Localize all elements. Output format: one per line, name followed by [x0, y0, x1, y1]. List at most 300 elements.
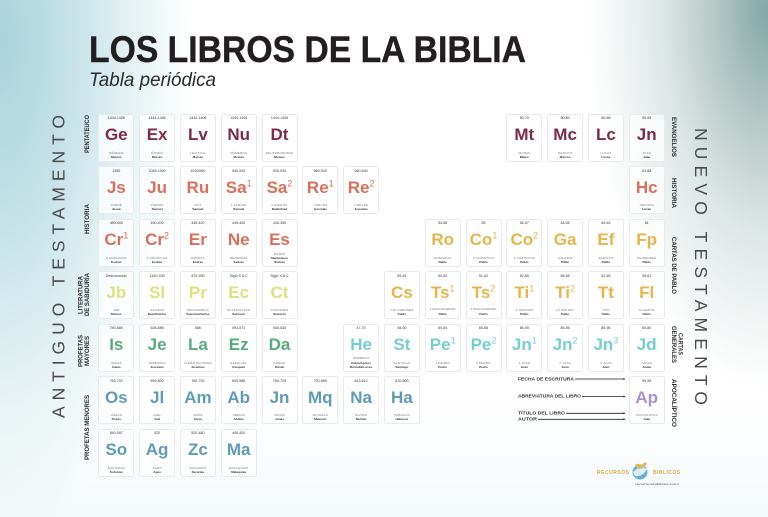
card: Sofonías: 640-597 [110, 431, 123, 435]
card: Oseas: OSEAS [111, 413, 122, 417]
card: Juan [629, 114, 665, 162]
card: Levítico: Moisés [193, 155, 203, 159]
card: Gálatas [547, 219, 583, 267]
card: 2 Timoteo: Pablo [561, 312, 569, 316]
card: Sofonías: So [105, 440, 127, 459]
card: 1 Samuel: Samuel [233, 207, 244, 211]
logo: Recursos Bíblicos: BIBLICOS [653, 470, 681, 476]
card: 2 Tesalonicenses: 51-52 [479, 274, 488, 278]
card: 3 Juan: 85-95 [601, 326, 610, 330]
card: Mateo: 50-70 [520, 116, 529, 120]
card: Abdías: 605-586 [232, 379, 245, 383]
card: Judas: 65-80 [642, 326, 651, 330]
card: Juan: JUAN [642, 151, 651, 155]
card: Hechos: Hc [636, 178, 658, 197]
card: Deuteronomio: DEUTERONOMIO [266, 151, 293, 155]
card: 1 Corintios: 1 CORINTIOS [473, 256, 494, 260]
card: Ezequiel: EZEQUIEL [230, 361, 247, 365]
card: Proverbios: 970-930 [191, 274, 204, 278]
card: Esdras: Esdras [193, 260, 203, 264]
card: 3 Juan: 3 JUAN [600, 361, 612, 365]
card: 2 Tesalonicenses: Pablo [479, 312, 488, 316]
card: Joel: JOEL [153, 413, 161, 417]
card: Amós: Am [184, 388, 212, 407]
card: Abdías: Abdías [234, 417, 244, 421]
card: 1 Corintios: 55 [482, 221, 486, 225]
card: 1 Pedro: 1 PEDRO [435, 361, 450, 365]
card: 1 Tesalonicenses: 1 TESALONICENSES [430, 308, 456, 311]
card: Amós: Amós [194, 417, 202, 421]
card: 1 Crónicas [98, 219, 134, 267]
card: Gálatas: Ga [554, 230, 576, 249]
card: Nahúm [343, 376, 379, 424]
card: 1 Juan [506, 324, 542, 372]
card: 1 Pedro: 60-64 [438, 326, 447, 330]
card: Josué: Josué [112, 207, 121, 211]
card: Habacuc: 610-600 [395, 379, 408, 383]
card: Jonás [262, 376, 298, 424]
card: Isaías: Is [109, 335, 123, 354]
card: Apocalipsis: APOCALIPSIS [636, 413, 658, 417]
card: Job: Moisés [111, 312, 122, 316]
card: Deuteronomio: Moisés [274, 155, 285, 159]
card: Efesios: 60-63 [601, 221, 610, 225]
card: Zacarías: Zacarías [192, 470, 204, 474]
card: 2 Corintios: 55-57 [520, 221, 529, 225]
card: Filipenses: FILIPENSES [637, 256, 656, 260]
card: Deuteronomio [262, 114, 298, 162]
card: Eclesiastés: Siglo X A.C [230, 274, 248, 278]
card: Miqueas: 700-680 [314, 379, 327, 383]
card: Daniel: Daniel [275, 365, 284, 369]
card: 2 Samuel: 2 SAMUEL [271, 203, 288, 207]
card: Rut: RUT [194, 203, 201, 207]
card: 2 Reyes [343, 166, 379, 214]
card: Rut: 1010/960 [190, 169, 205, 173]
card: Génesis: GÉNESIS [109, 151, 124, 155]
card: Salmos: SALMOS [150, 308, 164, 312]
card: 2 Timoteo: Ti2 [555, 283, 575, 302]
card: Lucas: LUCAS [600, 151, 611, 155]
card: Colosenses: Cs [391, 283, 413, 302]
card: 2 Juan [547, 324, 583, 372]
card: 1 Tesalonicenses [425, 271, 461, 319]
card: Joel: Jl [150, 388, 164, 407]
card: Habacuc: Ha [391, 388, 413, 407]
card: Mateo: Mt [514, 125, 534, 144]
card: Eclesiastés: ECLESIASTÉS [227, 308, 250, 312]
card: Romanos: Pablo [438, 260, 447, 264]
card: Jonás: 760-725 [273, 379, 286, 383]
card: Nahúm: Na [350, 388, 372, 407]
card: Amós: AMÓS [193, 413, 203, 417]
card: Amós [180, 376, 216, 424]
card: Éxodo [139, 114, 175, 162]
card: Colosenses: 59-61 [397, 274, 406, 278]
card: Lamentaciones [180, 324, 216, 372]
logo: Recursos Bíblicos: RECURSOS [597, 470, 630, 476]
card: Nehemías [221, 219, 257, 267]
card: 2 Tesalonicenses [466, 271, 502, 319]
card: Isaías: 740-680 [110, 326, 123, 330]
card: Habacuc: HABACUC [394, 413, 410, 417]
card: Nahúm: 613-612 [354, 379, 368, 383]
card: Ezequiel: 593-571 [232, 326, 245, 330]
card: Santiago: St [393, 335, 410, 354]
card: Colosenses [384, 271, 420, 319]
card: Hebreos: HEBREOS [353, 356, 369, 360]
card: Éxodo: ÉXODO [151, 151, 163, 155]
card: Oseas: Os [105, 388, 128, 407]
card: Deuteronomio: Dt [271, 125, 288, 144]
card: Levítico: LEVÍTICO [190, 151, 206, 155]
card: 2 Juan: Juan [561, 365, 569, 369]
card: Filemón: Pablo [642, 312, 651, 316]
card: 1 Timoteo [506, 271, 542, 319]
legend [518, 376, 626, 422]
card: 2 Samuel: Natán/Gad [272, 207, 287, 211]
card: Ezequiel [221, 324, 257, 372]
card: Miqueas: Mq [308, 388, 333, 407]
icon: globe [632, 462, 648, 480]
card: 1 Pedro [425, 324, 461, 372]
card: Zacarías: ZACARÍAS [190, 466, 206, 470]
card: Números: NÚMEROS [230, 151, 247, 155]
card: Filipenses: Fp [636, 230, 657, 249]
card: 2 Timoteo [547, 271, 583, 319]
card: Malaquías: Ma [227, 440, 250, 459]
card: Juan: Jn [637, 125, 657, 144]
card: 2 Juan: Jn2 [553, 335, 578, 354]
logo: Recursos Bíblicos: recursosbiblicos.com [635, 482, 680, 486]
card: Colosenses: Pablo [398, 312, 406, 316]
category: Literatura de sabiduría [78, 273, 91, 316]
card: Nehemías: Ne [228, 230, 250, 249]
card: Malaquías: 440-400 [232, 431, 245, 435]
card: 3 Juan [588, 324, 624, 372]
card: 3 Juan: Jn3 [593, 335, 618, 354]
card: 1 Crónicas: 1 CRÓNICAS [106, 256, 126, 260]
card: Abdías: ABDÍAS [233, 413, 245, 417]
card: 2 Tesalonicenses: Ts2 [472, 283, 495, 302]
card: Ester: Es [269, 230, 290, 249]
legend: título: TÍTULO DEL LIBRO [518, 411, 566, 416]
card: Proverbios: PROVERBIOS [187, 308, 209, 312]
card: Génesis: Ge [105, 125, 128, 144]
card: Eclesiastés: Salomón [232, 312, 245, 316]
category: Profetas menores: PROFETAS MENORES [84, 395, 91, 460]
card: Romanos: Ro [431, 230, 454, 249]
legend: abreviatura: ABREVIATURA DEL LIBRO [518, 394, 582, 399]
card: Oseas [98, 376, 134, 424]
card: Proverbios: Pr [189, 283, 207, 302]
card: 1 Pedro: Pe1 [430, 335, 456, 354]
card: 2 Crónicas [139, 219, 175, 267]
card: Lamentaciones: Jeremías [191, 365, 205, 369]
card: Nahúm: NAHÚM [355, 413, 367, 417]
card: 1 Reyes [302, 166, 338, 214]
card: 1 Crónicas: Esdras [111, 260, 121, 264]
card: Ageo: Ageo [153, 470, 161, 474]
card: 1 Tesalonicenses: Pablo [438, 312, 447, 316]
category: Cartas generales: CARTAS [676, 333, 684, 355]
card: Tito: 62-65 [601, 274, 610, 278]
card: Mateo: Mateo [520, 155, 529, 159]
card: Amós: 760-750 [191, 379, 204, 383]
card: Lucas [588, 114, 624, 162]
category: Profetas mayores [78, 335, 91, 367]
card: Sofonías [98, 429, 134, 477]
card: Esdras: 445-420 [191, 221, 204, 225]
card: Jonás: Jonás [275, 417, 284, 421]
card: Jueces: Ju [147, 178, 167, 197]
card: 1 Samuel: 940-930 [232, 169, 245, 173]
card: 2 Juan: 2 JUAN [559, 361, 571, 365]
card: 2 Pedro [466, 324, 502, 372]
card: 1 Pedro: Pedro [438, 365, 447, 369]
card: Jueces: JUECES [151, 203, 164, 207]
card: Génesis [98, 114, 134, 162]
card: 2 Samuel: 940-930 [273, 169, 286, 173]
card: Zacarías: 520-480 [191, 431, 204, 435]
card: Tito: TITO [602, 308, 610, 312]
logo: Recursos Bíblicos [597, 462, 681, 486]
side label: Antiguo Testamento: ANTIGUO TESTAMENTO [48, 115, 68, 418]
card: Jeremías: 626-586 [150, 326, 164, 330]
card: Esdras: Er [189, 230, 207, 249]
card: Josué: Js [107, 178, 126, 197]
card: Santiago: SANTIAGO [393, 361, 410, 365]
card: Hebreos: Bernabé/Lucas [350, 365, 372, 369]
card: Levítico [180, 114, 216, 162]
card: Miqueas: Miqueas [314, 417, 326, 421]
card: Miqueas: MIQUEAS [313, 413, 328, 417]
card: Marcos [547, 114, 583, 162]
card: Efesios: Pablo [602, 260, 610, 264]
card: Ester: /Esdras [274, 260, 285, 264]
category: Historia NT: HISTORIA [670, 178, 677, 209]
card: 1 Corintios: Co1 [470, 230, 497, 249]
category: Cartas generales [670, 326, 684, 363]
card: Ezequiel: Ez [229, 335, 249, 354]
card: Tito: Pablo [602, 312, 610, 316]
card: Judas: Jd [637, 335, 657, 354]
card: 2 Juan: 85-95 [560, 326, 570, 330]
card: 1 Tesalonicenses: 50-52 [438, 274, 447, 278]
category: Pentateuco: PENTATEUCO [84, 115, 91, 153]
category: Historia: HISTORIA [84, 203, 91, 234]
card: 2 Pedro: 2 PEDRO [476, 361, 491, 365]
card: Ezequiel: Ezequiel [232, 365, 245, 369]
category labels right [670, 117, 684, 427]
card: Lamentaciones: La [188, 335, 208, 354]
card: Gálatas: 48-55 [560, 221, 570, 225]
card: Oseas: Oseas [112, 417, 121, 421]
card: Apocalipsis: Juan [643, 417, 650, 421]
card: Génesis: 1444-1406 [108, 116, 125, 120]
card: 1 Timoteo: Pablo [520, 312, 529, 316]
card: 1 Reyes: 1 REYES [313, 203, 327, 207]
card: Romanos: 54-58 [438, 221, 447, 225]
card: Santiago: Santiago [395, 365, 408, 369]
card: Filemón [629, 271, 665, 319]
card: Job [98, 271, 134, 319]
category: Literatura de sabiduría: LITERATURA [78, 275, 84, 314]
card: Hechos: 63-68 [642, 169, 651, 173]
card: Daniel: Da [269, 335, 290, 354]
card: Nahúm: Nahúm [356, 417, 366, 421]
card: Hebreos: He [350, 335, 372, 354]
card: 2 Reyes: Re2 [348, 178, 374, 197]
card: 1 Samuel: 1 SAMUEL [230, 203, 247, 207]
card: Joel [139, 376, 175, 424]
card: Tito: Tt [598, 283, 614, 302]
card: Ageo [139, 429, 175, 477]
card: Jeremías: Jeremías [150, 365, 164, 369]
card: Josué: 1390 [112, 169, 120, 173]
card: Apocalipsis: Ap [635, 388, 658, 407]
card: Isaías [98, 324, 134, 372]
card: Salmos: 1440-930 [150, 274, 165, 278]
card: 1 Tesalonicenses: Ts1 [431, 283, 454, 302]
card: 2 Samuel: Sa2 [267, 178, 292, 197]
card: Filipenses: 61 [645, 221, 649, 225]
card: Efesios [588, 219, 624, 267]
card: Lucas: Lucas [601, 155, 610, 159]
card: Filemón: FILEMÓN [639, 308, 654, 312]
card: Filipenses [629, 219, 665, 267]
card: Cantares: Siglo X A.C [270, 274, 289, 278]
card: Deuteronomio: 1444-1406 [271, 116, 288, 120]
card: Tito [588, 271, 624, 319]
card: 2 Pedro: 65-68 [479, 326, 488, 330]
card: 1 Juan: 85-95 [520, 326, 529, 330]
card: Hebreos: 47-70 [356, 326, 366, 330]
card: 3 Juan: Juan [602, 365, 610, 369]
card: Cantares: CANTARES [271, 308, 288, 312]
card: Marcos: MARCOS [558, 151, 572, 155]
legend: autor: AUTOR [518, 417, 538, 422]
card: Job: Desconocido [106, 274, 127, 278]
card: Habacuc: Habacuc [395, 417, 408, 421]
card: Gálatas: Pablo [561, 260, 569, 264]
card: 1 Timoteo: 1 TIMOTEO [515, 308, 533, 312]
card: 2 Timoteo: 66-68 [560, 274, 570, 278]
card: 2 Crónicas: 2 CRÓNICAS [147, 256, 167, 260]
category: Literatura de sabiduría: DE SABIDURÍA [83, 273, 91, 316]
card: Juan: 90-95 [642, 116, 651, 120]
title: LOS LIBROS DE LA BIBLIA [89, 28, 526, 70]
card: Mateo: MATEO [519, 151, 530, 155]
legend: fecha: FECHA DE ESCRITURA [518, 376, 575, 382]
card: Salmos: David/Varios [148, 312, 166, 316]
card: Números: 1444-1406 [230, 116, 247, 120]
card: 1 Timoteo: Ti1 [514, 283, 534, 302]
card: 1 Crónicas: 450-400 [110, 221, 123, 225]
card: Éxodo: Moisés [152, 155, 162, 159]
card: 2 Corintios [506, 219, 542, 267]
card: Apocalipsis: 95-96 [642, 379, 651, 383]
card: Job: JOB [113, 308, 120, 312]
category: Cartas de Pablo: CARTAS DE PABLO [670, 237, 677, 294]
card: Esdras [180, 219, 216, 267]
card: 2 Samuel [262, 166, 298, 214]
card: Apocalipsis [629, 376, 665, 424]
card: Rut: Samuel [192, 207, 203, 211]
card: Lucas: 60-68 [601, 116, 610, 120]
card: 2 Tesalonicenses: 2 TESALONICENSES [471, 308, 496, 311]
card: 2 Corintios: 2 CORINTIOS [514, 256, 535, 260]
card: Hechos: Lucas [642, 207, 651, 211]
card: Ester: 440-350 [273, 221, 286, 225]
card: 1 Samuel: Sa1 [226, 178, 252, 197]
card: 1 Juan: Juan [521, 365, 528, 369]
card: Marcos: Mc [553, 125, 577, 144]
card: Jeremías: JEREMÍAS [149, 361, 165, 365]
card: 2 Reyes: 2 REYES [354, 203, 368, 207]
card: Cantares: Salomón [273, 312, 286, 316]
card: Daniel: DANIEL [273, 361, 286, 365]
category: Cartas generales: GENERALES [670, 326, 677, 363]
card: 1 Crónicas: Cr1 [104, 230, 128, 249]
card: Daniel [262, 324, 298, 372]
card: Ester [262, 219, 298, 267]
card: Números [221, 114, 257, 162]
card: Josué: JOSUÉ [111, 203, 122, 207]
subtitle: Tabla periódica [89, 70, 216, 91]
card: Oseas: 753-701 [110, 379, 123, 383]
card: Lamentaciones: LAMENTACIONES [184, 361, 212, 365]
card: Juan: Juan [643, 155, 650, 159]
card: Eclesiastés [221, 271, 257, 319]
card: Éxodo: Ex [147, 125, 167, 144]
card: Habacuc [384, 376, 420, 424]
card: Ageo: AGEO [152, 466, 162, 470]
card: Josué [98, 166, 134, 214]
card: Zacarías [180, 429, 216, 477]
card: Jonás: Jn [270, 388, 289, 407]
category labels left [78, 115, 91, 460]
card: 1 Juan: Jn1 [512, 335, 537, 354]
card: Filemón: Fl [639, 283, 654, 302]
card: Santiago [384, 324, 420, 372]
card: Sofonías: SOFONÍAS [108, 466, 125, 470]
card: 1 Reyes: 560-540 [314, 169, 327, 173]
category: Apocalíptico: APOCALÍPTICO [670, 379, 678, 427]
card: 2 Crónicas: Cr2 [145, 230, 169, 249]
card: Abdías: Ab [227, 388, 250, 407]
card: Jeremías [139, 324, 175, 372]
card: Proverbios: Salomón/Varios [186, 312, 210, 316]
category: Profetas mayores: PROFETAS [78, 335, 84, 367]
card: Cantares: Ct [271, 283, 288, 302]
card: 1 Corintios: Pablo [479, 260, 488, 264]
card: Job: Jb [106, 283, 126, 302]
card: Filipenses: Pablo [642, 260, 651, 264]
card: Ageo: 520 [154, 431, 160, 435]
card: Nehemías: NEHEMÍAS [230, 256, 247, 260]
card: Nehemías: Esdras [234, 260, 244, 264]
card: 1 Corintios [466, 219, 502, 267]
card: 1 Juan: 1 JUAN [519, 361, 530, 365]
card: Filemón: 59-61 [642, 274, 651, 278]
card: Jeremías: Je [148, 335, 167, 354]
card: Eclesiastés: Ec [228, 283, 249, 302]
card: Esdras: ESDRAS [191, 256, 205, 260]
card: Judas: JUDAS [641, 361, 652, 365]
card: Salmos [139, 271, 175, 319]
card: 2 Reyes: Jeremías [354, 207, 368, 211]
